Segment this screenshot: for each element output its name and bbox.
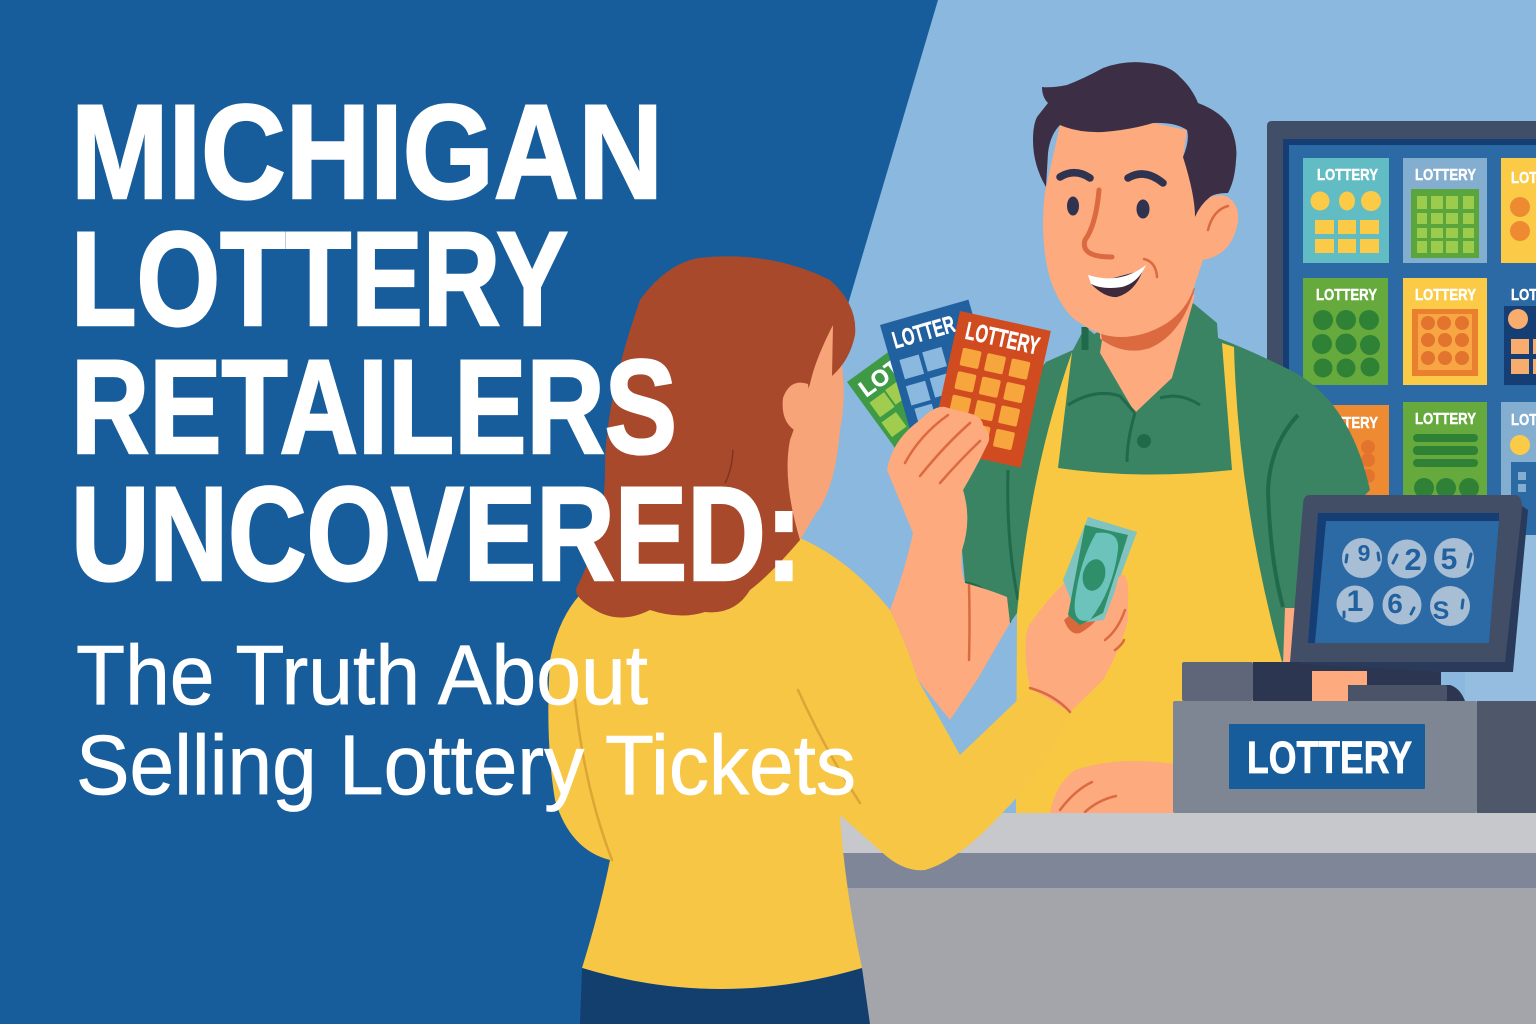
- banknote: [1063, 517, 1137, 625]
- hair: [1033, 62, 1236, 217]
- title line 1: MICHIGAN: [71, 78, 663, 227]
- blue ticket: [880, 300, 998, 429]
- lottery balls: S: [1433, 597, 1449, 625]
- shopkeeper: neck: [1100, 295, 1195, 413]
- lottery balls: [1336, 538, 1474, 626]
- customer: hair strand: [725, 450, 733, 483]
- counter: [840, 813, 1536, 1024]
- banknote shadow: [1064, 578, 1118, 633]
- ticket: light blue with green grid: [1403, 158, 1487, 263]
- cheek line: [1144, 259, 1157, 277]
- mouth: [1091, 270, 1143, 297]
- shopkeeper: shirt: [962, 300, 1370, 662]
- green ticket: [847, 343, 952, 453]
- red ticket: [930, 311, 1051, 468]
- terminal screen: [1308, 513, 1499, 643]
- shopkeeper: head: [1033, 62, 1238, 337]
- customer: hair: [576, 256, 855, 618]
- cash register with lottery screen: [1173, 495, 1536, 813]
- lottery sign: LOTTERY: [1247, 732, 1412, 783]
- title line 2: LOTTERY: [71, 205, 568, 354]
- ticket: light blue cut off: [1501, 402, 1536, 507]
- lottery balls: 9: [1358, 540, 1370, 566]
- subtitle: [76, 628, 856, 812]
- customer: sweater: [548, 538, 1070, 989]
- shopkeeper: collar: [1068, 303, 1222, 462]
- nose: [1084, 190, 1112, 257]
- arm and hand holding tickets: [887, 407, 1010, 720]
- ticket: yellow with orange panel: LOTTERY: [1415, 287, 1476, 304]
- lottery display monitor: [1267, 121, 1536, 535]
- ear fold: [1208, 206, 1228, 230]
- lottery sign: [1229, 724, 1425, 789]
- lottery balls: 5: [1441, 543, 1457, 576]
- title line 3: RETAILERS: [71, 333, 677, 482]
- lottery balls: 2: [1404, 542, 1422, 577]
- subtitle line 1: The Truth About: [76, 628, 648, 722]
- red ticket: LOTTERY: [963, 317, 1042, 361]
- ear: [1197, 195, 1238, 260]
- shopkeeper: right forearm stub: [1283, 608, 1295, 665]
- customer hand base: [1025, 575, 1128, 712]
- lottery balls: 6: [1387, 588, 1403, 619]
- eyebrows: [1060, 173, 1163, 183]
- ticket: green circles: [1303, 278, 1388, 385]
- green ticket: LOTT: [854, 346, 917, 402]
- customer: jeans: [580, 968, 870, 1024]
- eyes: [1067, 196, 1079, 216]
- title: [71, 78, 802, 609]
- face: [1043, 123, 1203, 337]
- subtitle line 2: Selling Lottery Tickets: [76, 718, 856, 812]
- shopkeeper: yellow apron: [1016, 343, 1282, 813]
- ticket: orange partly hidden: [1317, 405, 1389, 505]
- blue ticket: LOTTER: [889, 311, 958, 355]
- ticket: yellow with orange panel: [1403, 278, 1487, 385]
- ticket: light blue with green grid: LOTTERY: [1415, 167, 1476, 184]
- ticket: green circles: LOTTERY: [1316, 287, 1377, 304]
- register body: [1173, 701, 1477, 813]
- ticket: yellow cut off: [1501, 158, 1536, 263]
- ticket: green lines: LOTTERY: [1415, 411, 1476, 428]
- lottery balls: 1: [1347, 585, 1363, 618]
- ticket: dark blue cut off: [1504, 287, 1536, 385]
- shirt button: [1137, 434, 1151, 448]
- customer: ear: [783, 383, 812, 433]
- ticket: teal: [1303, 158, 1389, 263]
- terminal bezel: [1300, 498, 1528, 672]
- background: light blue diagonal panel: [635, 0, 1536, 1024]
- customer hand finger and creases: [1030, 575, 1128, 712]
- ticket: teal: LOTTERY: [1317, 167, 1378, 184]
- shopkeeper: hand on counter: [1050, 761, 1180, 813]
- customer: neck and face: [770, 325, 844, 545]
- ticket: green lines: [1403, 402, 1487, 507]
- lottery tickets fan: [847, 300, 1051, 468]
- ticket: orange partly hidden: LOTTERY: [1317, 415, 1378, 432]
- background: lighter patch right of terminal: [1465, 535, 1536, 705]
- shopkeeper: neck shadow: [1100, 288, 1195, 351]
- title line 4: UNCOVERED:: [71, 460, 802, 609]
